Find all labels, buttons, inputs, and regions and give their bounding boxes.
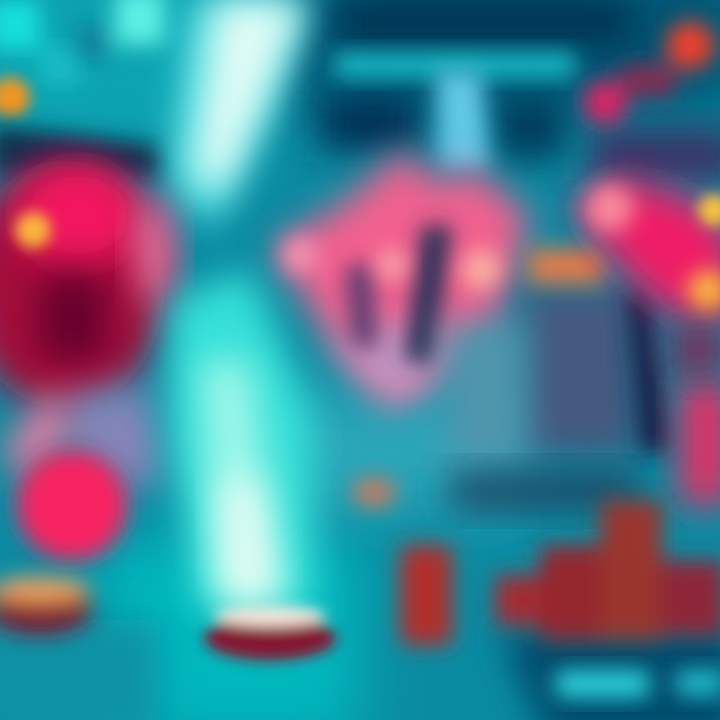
- left dish: [0, 577, 92, 634]
- grey-blue panel: [518, 285, 640, 455]
- dark shape at top centre: [320, 0, 630, 160]
- dark band above left creature: [0, 125, 165, 180]
- orange dot top-left: [0, 77, 30, 117]
- bottom-right cyan glow: [555, 670, 720, 698]
- faded panel left extension: [445, 320, 527, 465]
- right pink cluster: [570, 175, 720, 505]
- dark panel side: [625, 290, 672, 455]
- bottom centre dish: [204, 606, 336, 660]
- left red creature: [0, 160, 175, 410]
- grey-purple figure at lower left: [0, 385, 165, 490]
- cyan bars top centre: [335, 52, 575, 170]
- red bars bottom right: [495, 500, 720, 640]
- red and pink dots top-right: [583, 21, 714, 124]
- top-left cyan glow: [0, 0, 165, 85]
- small orange dot: [352, 477, 396, 507]
- red cup: [400, 545, 452, 645]
- dark panel base: [450, 472, 640, 510]
- pink ball: [17, 450, 127, 560]
- orange panel cap: [528, 248, 604, 284]
- white light beam top: [170, 0, 310, 230]
- pink diamond shape with dark stripes: [272, 148, 530, 405]
- cyan light beam bottom: [170, 270, 315, 610]
